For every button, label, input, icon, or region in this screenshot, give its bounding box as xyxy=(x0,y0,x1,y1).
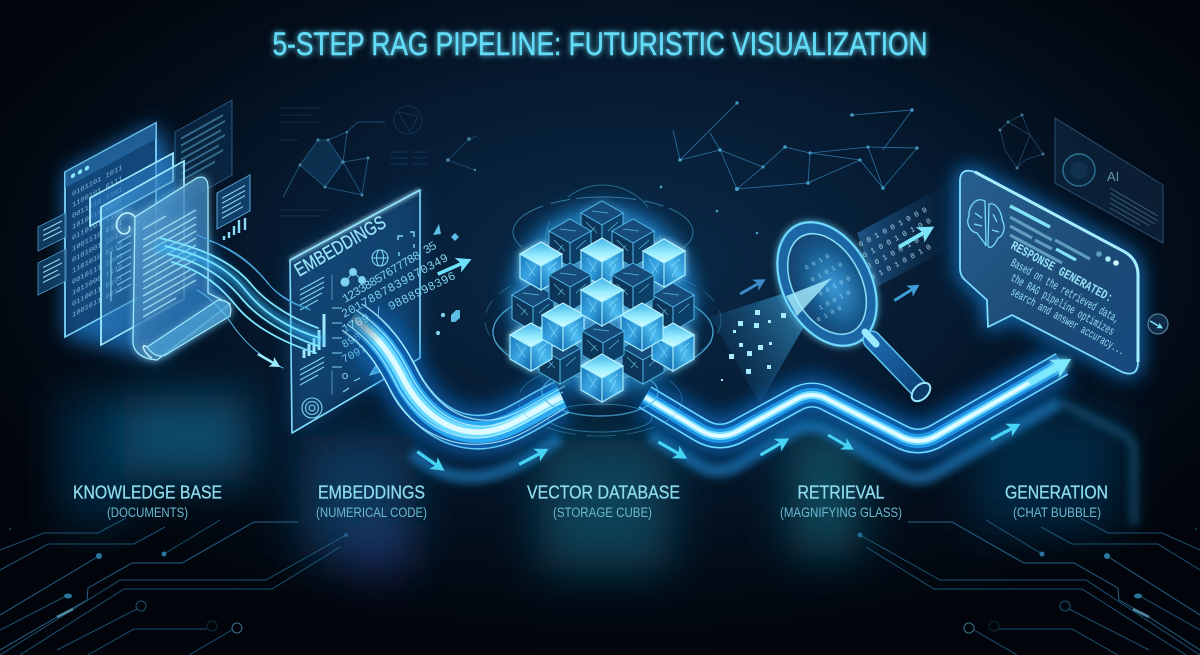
label: vector database: (STORAGE CUBE) xyxy=(553,505,652,520)
back AI panel: AI xyxy=(1107,169,1119,184)
circuit traces left xyxy=(0,518,348,655)
response text: search and answer accuracy... xyxy=(1008,285,1127,359)
binary document panel: 0110101 1100 xyxy=(72,208,123,243)
data particles xyxy=(721,310,786,381)
label: vector database: VECTOR DATABASE xyxy=(527,482,680,502)
binary document panel: 0110011 0101 xyxy=(72,274,123,309)
panel icons xyxy=(300,224,460,418)
label: embeddings: (NUMERICAL CODE) xyxy=(316,505,427,520)
step 1 icon: knowledge base documents xyxy=(38,100,250,360)
lens digits: 0 0 1 0 0 xyxy=(818,275,852,298)
next button xyxy=(1148,314,1168,334)
numeric rows: 1709 / 9888998396 xyxy=(340,269,458,337)
lens digits: 1 0 0 1 0 xyxy=(818,289,852,312)
binary data band: 0 1 0 1 0 0 1 0 xyxy=(870,244,933,283)
scroll xyxy=(117,177,231,360)
main data pipe xyxy=(352,318,1062,441)
faint network near bubble xyxy=(998,114,1044,170)
label: knowledge base: (DOCUMENTS) xyxy=(107,505,188,520)
label: generation: (CHAT BUBBLE) xyxy=(1013,505,1101,520)
binary document panel: 1001110 0101 xyxy=(72,219,123,254)
lens digits: 0 1 0 1 0 xyxy=(810,261,844,284)
handle xyxy=(865,332,934,405)
binary document panel: 0011010 1101 xyxy=(72,186,123,221)
binary data band: 0 0 1 0 0 1 0 0 xyxy=(866,233,929,272)
constellation left xyxy=(280,106,477,216)
binary document panel: 1001011 0011 xyxy=(72,285,123,320)
pipe end arrow xyxy=(1024,350,1076,392)
response text xyxy=(1008,238,1127,359)
step 3 icon: vector database cube xyxy=(485,185,721,436)
lens xyxy=(757,205,897,363)
brain icon xyxy=(968,200,1004,247)
response text: the RAG pipeline optimizes xyxy=(1008,271,1117,339)
back AI panel xyxy=(1055,118,1163,243)
glass pages xyxy=(90,153,173,226)
numeric rows: 2017887839870349 xyxy=(339,251,451,321)
lens bright point xyxy=(786,278,832,316)
orbit rings xyxy=(485,185,721,436)
arrow xyxy=(434,252,475,281)
binary document panel: 1011000 1110 xyxy=(72,263,123,298)
numeric rows: 898 xyxy=(340,332,363,352)
cube blocks xyxy=(510,201,694,402)
numeric rows xyxy=(332,239,458,367)
binary document panel: 1100101 0111 xyxy=(72,175,123,210)
label: knowledge base xyxy=(73,482,222,520)
response text: Based on the retrieved data, xyxy=(1008,256,1122,327)
step 5 icon: generation chat bubble xyxy=(960,171,1138,374)
binary document panel: 1010011 0010 xyxy=(72,197,123,232)
binary document panel xyxy=(65,123,156,337)
numeric rows: 12338857677788 35 xyxy=(340,239,440,306)
small flow arrows xyxy=(413,417,1024,477)
lens digits: 0 0 1 0 xyxy=(804,253,831,272)
label: generation xyxy=(1005,482,1108,520)
label: retrieval xyxy=(780,482,902,520)
label: vector database xyxy=(527,482,680,520)
numeric rows: 7097 xyxy=(340,344,369,367)
reflections on floor xyxy=(60,395,1134,575)
label: generation: GENERATION xyxy=(1005,482,1108,502)
flow lines: documents to embeddings xyxy=(160,235,320,372)
binary document panel: 0101001 1011 xyxy=(72,230,123,265)
binary document panel: 0010111 1001 xyxy=(72,252,123,287)
panel heading: EMBEDDINGS xyxy=(291,212,390,281)
side note panels xyxy=(38,175,250,295)
label: embeddings: EMBEDDINGS xyxy=(318,482,425,502)
binary data band: 0 1 0 0 1 0 1 0 0 xyxy=(862,217,933,261)
label: retrieval: RETRIEVAL xyxy=(798,482,884,502)
header bars xyxy=(1010,206,1119,266)
title: 5-STEP RAG PIPELINE: FUTURISTIC VISUALIZATION xyxy=(272,26,928,62)
binary document panel: 0101101 1011 xyxy=(72,164,123,199)
light beam xyxy=(710,278,832,403)
label: retrieval: (MAGNIFYING GLASS) xyxy=(780,505,902,520)
binary data band: 0 0 1 0 0 1 0 0 0 xyxy=(858,206,929,250)
label: embeddings xyxy=(316,482,427,520)
circuit traces right xyxy=(858,518,1200,655)
lens digits: 0 1 0 0 xyxy=(816,305,843,324)
binary data band xyxy=(857,180,955,287)
constellation right xyxy=(660,101,919,234)
binary document panel: 1101010 0110 xyxy=(72,241,123,276)
lens digits xyxy=(804,253,852,324)
pipe strand highlights xyxy=(342,304,565,444)
label: knowledge base: KNOWLEDGE BASE xyxy=(73,482,222,502)
step 4 icon: retrieval magnifying glass xyxy=(710,180,955,405)
retrieval arrows xyxy=(737,219,939,306)
response text: RESPONSE GENERATED: xyxy=(1008,238,1115,306)
step 2 icon: embeddings panel xyxy=(290,190,475,433)
back data panel xyxy=(175,100,232,207)
